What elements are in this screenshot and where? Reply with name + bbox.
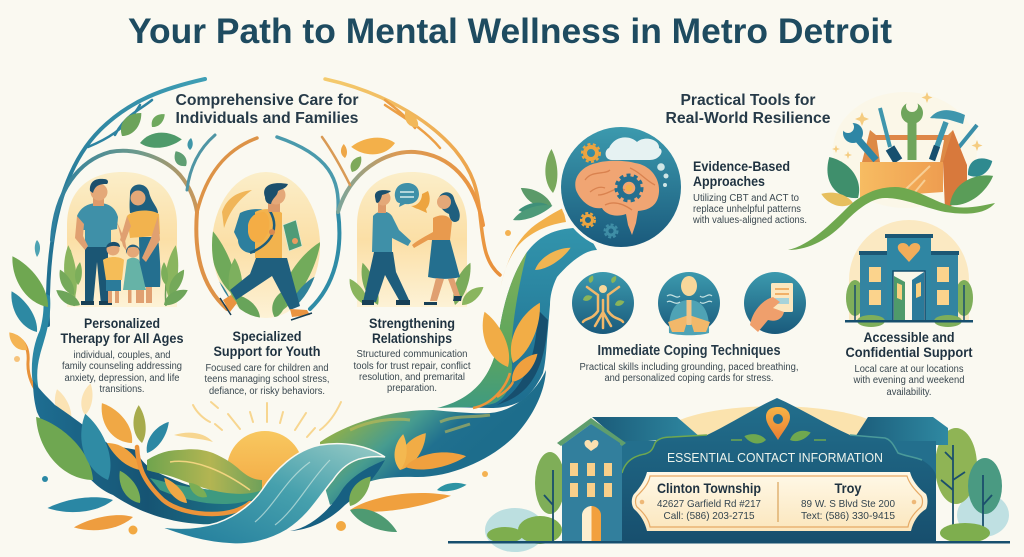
text: strengthening relationships: resolution, and premarital (359, 372, 465, 383)
icon: accessible clinic building (845, 220, 973, 327)
house with heart (557, 418, 626, 541)
text: evidence-based approaches: Utilizing CBT and ACT to (693, 193, 799, 204)
text: personalized therapy for all ages: Personalized (84, 316, 160, 331)
text: evidence-based approaches (692, 159, 807, 226)
green hill (147, 449, 262, 494)
lower green strip (150, 478, 262, 504)
icon: hand holding card (744, 272, 806, 334)
heading (666, 92, 831, 127)
contact heading: ESSENTIAL CONTACT INFORMATION (667, 450, 883, 465)
icon: brain with gears (558, 124, 684, 250)
text: personalized therapy for all ages: family counseling addressing (62, 361, 182, 372)
text: specialized support for youth: Support for Youth (214, 344, 320, 359)
text: accessible and confidential support: Local care at our locations (854, 364, 964, 375)
text: strengthening relationships: Structured communication (356, 349, 468, 360)
text: accessible and confidential support: Confidential Support (846, 344, 973, 360)
text: specialized support for youth (204, 329, 330, 397)
orange vine (137, 447, 250, 514)
text: accessible and confidential support (846, 329, 973, 398)
accent dots (14, 230, 511, 534)
address plate (632, 472, 928, 531)
text: evidence-based approaches: with values-aligned actions. (692, 215, 807, 226)
text: immediate coping techniques: Practical skills including grounding, paced breathing, (580, 362, 798, 373)
left dark band (33, 380, 262, 524)
arching tree branches (48, 79, 500, 325)
text: personalized therapy for all ages (60, 316, 184, 395)
sun and rays (174, 402, 341, 507)
text: strengthening relationships: tools for trust repair, conflict (354, 361, 471, 372)
orange blob (107, 443, 140, 470)
illustration: youth walking (212, 172, 320, 321)
text: immediate coping techniques (580, 343, 798, 384)
text: evidence-based approaches: Evidence-Based (693, 159, 790, 174)
main building panel (622, 398, 936, 541)
text: accessible and confidential support: with evening and weekend (853, 375, 964, 386)
back roofs (592, 417, 948, 541)
sun backdrop (670, 406, 880, 440)
panel: essential contact information (448, 398, 1010, 552)
text: evidence-based approaches: replace unhelpful patterns (693, 204, 801, 215)
text: accessible and confidential support: Accessible and (864, 329, 954, 345)
clinton township address (657, 481, 761, 522)
pale leaves (50, 382, 95, 428)
text: evidence-based approaches: Approaches (693, 174, 765, 189)
rising green edge (437, 252, 527, 408)
rising teal band to brain (443, 228, 597, 408)
heading: Comprehensive Care for (176, 92, 358, 109)
title: Your Path to Mental Wellness in Metro Detroit (128, 12, 892, 51)
text: specialized support for youth: teens managing school stress, (204, 374, 330, 385)
text: accessible and confidential support: availability. (886, 387, 932, 398)
heading: Real-World Resilience (666, 110, 831, 127)
panel: comprehensive care for individuals and families (48, 79, 500, 397)
troy address (801, 481, 895, 522)
text: immediate coping techniques: Immediate Coping Techniques (598, 343, 780, 359)
text: personalized therapy for all ages: individual, couples, and (74, 350, 170, 361)
text: strengthening relationships (354, 316, 471, 394)
text: strengthening relationships: preparation. (387, 383, 437, 394)
heading: Practical Tools for (680, 92, 816, 109)
orange ribbon (500, 208, 566, 290)
text: strengthening relationships: Strengthening (369, 316, 455, 331)
leaf stem and streaks (473, 373, 513, 408)
text: personalized therapy for all ages: anxiety, depression, and life (64, 373, 180, 384)
river (157, 444, 385, 544)
heading (176, 92, 358, 127)
illustration: family (53, 172, 190, 310)
text: specialized support for youth: Focused care for children and (206, 363, 328, 374)
illustration: couple handshake (345, 172, 486, 308)
text: strengthening relationships: Relationships (372, 331, 452, 346)
flowing river and foliage path (3, 149, 597, 544)
icon: coping circles (572, 272, 806, 335)
icon: location pin with leaves (731, 407, 826, 445)
text: personalized therapy for all ages: transitions. (100, 384, 144, 395)
clinton township address: Call: (586) 203-2715 (664, 510, 755, 522)
landscape bushes and trees (485, 428, 1009, 552)
text: specialized support for youth: defiance, or risky behaviors. (209, 386, 325, 397)
panel: practical tools for real-world resilience (558, 92, 998, 398)
clinton township address: 42627 Garfield Rd #217 (657, 498, 761, 510)
ground line (448, 541, 1010, 544)
branch leaves (115, 107, 421, 174)
icon: breathing figure (658, 272, 720, 335)
troy address: 89 W. S Blvd Ste 200 (801, 498, 895, 510)
text: specialized support for youth: Specialized (232, 329, 302, 344)
foliage leaves (3, 149, 573, 538)
rising dark shade (497, 310, 548, 405)
icon: toolbox (788, 92, 998, 250)
text: immediate coping techniques: and personalized coping cards for stress. (604, 373, 774, 384)
right lower band (320, 370, 546, 505)
clinton township address: Clinton Township (657, 481, 761, 496)
text: personalized therapy for all ages: Therapy for All Ages (60, 331, 184, 346)
heading: Individuals and Families (176, 110, 358, 127)
troy address: Text: (586) 330-9415 (801, 510, 895, 522)
icon: person with roots (572, 272, 634, 334)
left thin vine (16, 292, 57, 410)
troy address: Troy (834, 481, 862, 496)
